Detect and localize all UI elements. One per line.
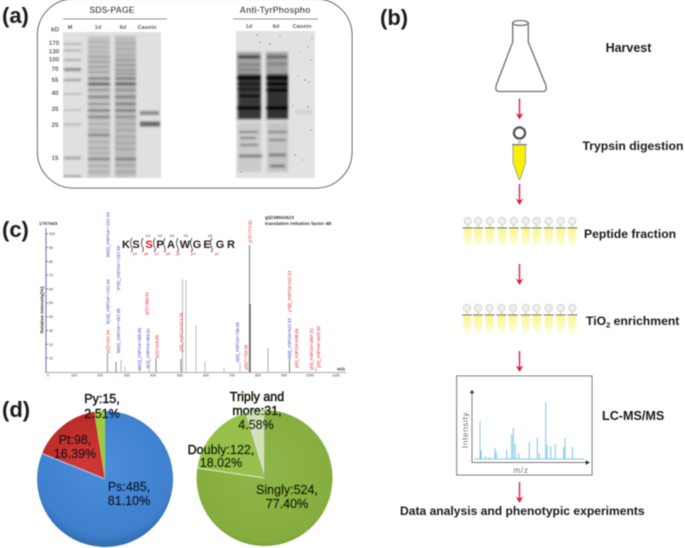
arrow	[516, 351, 523, 372]
label: LC-MS/MS: LC-MS/MS	[602, 409, 664, 423]
pie chart: phosphosite residues	[37, 392, 173, 547]
kD marker labels: kD	[51, 26, 59, 34]
western blot image	[236, 31, 315, 178]
chart: LC-MS/MS spectrum box	[457, 376, 592, 475]
panel label (b): (b)	[380, 5, 408, 30]
peptide sequence: R	[227, 239, 235, 251]
slice: Triply	[245, 410, 264, 478]
label: TiO2 enrichment: TiO	[586, 314, 606, 328]
SDS lane headers: Casein	[137, 25, 157, 31]
spectrum title	[265, 215, 332, 226]
label: data analysis: Data analysis and phenotypic experiments	[400, 504, 645, 518]
fragment ion labels: b(6)_H3PO4+736.95	[235, 322, 240, 362]
peptide sequence: S	[132, 239, 140, 251]
y axis: 100	[49, 232, 55, 236]
label: TiO2 enrichment: enrichment	[610, 314, 679, 328]
icon: flask	[496, 20, 546, 92]
x axis: 400	[150, 374, 156, 378]
western lane headers	[246, 24, 312, 30]
peptide sequence: y9	[133, 251, 138, 256]
kD marker labels: 100	[49, 56, 60, 64]
fragment ion labels: y(7)+772.01	[248, 219, 252, 243]
slice: Singly	[197, 410, 333, 546]
peptide sequence: y5	[176, 251, 181, 256]
fragment ion labels: b6(5)_H3PO4++267.05	[116, 308, 121, 353]
arrow	[516, 482, 523, 502]
pie labels: Singly:524,	[256, 483, 318, 497]
y axis: 20	[49, 343, 53, 347]
kD marker labels: 15	[51, 155, 59, 162]
fragment ion labels: y(2)+231.94	[106, 329, 110, 353]
x axis: 1100	[332, 374, 340, 378]
peptide sequence: G	[193, 239, 201, 251]
peptide sequence	[122, 233, 235, 256]
SDS lane headers: 1d	[95, 25, 102, 31]
kD marker labels: 25	[51, 122, 59, 129]
slice: Pt	[42, 412, 105, 479]
slice: Doubly	[197, 413, 264, 478]
y axis: 30	[49, 329, 53, 333]
peptide sequence: b3	[146, 233, 151, 238]
y axis title: Relative Intensity(%)	[40, 286, 46, 333]
panel: MS/MS spectrum	[39, 212, 346, 378]
western lane headers: 6d	[273, 24, 280, 30]
peptide sequence: S	[145, 239, 153, 251]
fragment ion labels: y(8)_H3PO4+513.55	[179, 312, 184, 352]
pie labels: Py:15,	[84, 392, 120, 406]
y axis	[46, 228, 55, 373]
frame	[38, 0, 352, 188]
label: Harvest: Harvest	[606, 41, 652, 55]
spectrum peaks	[108, 245, 316, 372]
peptide sequence: y2	[215, 251, 220, 256]
kD marker labels: 40	[51, 90, 59, 97]
fragment ion labels: y(9)_H3PO4+938.84	[294, 328, 299, 368]
western lane headers: 1d	[246, 24, 253, 30]
x axis: 0	[47, 374, 49, 378]
x axis: 200	[97, 374, 103, 378]
chart: LC-MS/MS spectrum box: m/z	[513, 465, 529, 475]
peptide sequence: y8	[144, 251, 149, 256]
peptide sequence: P	[156, 239, 164, 251]
y axis: 60	[49, 288, 53, 292]
x axis: m/z	[337, 366, 346, 372]
peptide sequence: b8	[208, 233, 213, 238]
pie labels: 81.10%	[108, 494, 150, 508]
panel label (a): (a)	[2, 3, 29, 28]
kD marker labels: 70	[51, 66, 59, 73]
label: Peptide fraction: Peptide fraction	[584, 227, 676, 241]
fragment ion labels: b5(3)_H3PO4+365.09	[137, 327, 142, 370]
fragment ion labels: y(6)7+753.99	[244, 344, 248, 370]
fragment ion labels: b5(6)_H3PO4++231.94	[106, 212, 110, 257]
SDS lane headers	[68, 25, 157, 31]
x axis	[46, 366, 346, 378]
label: TiO2 enrichment: 2	[606, 320, 610, 330]
kD marker labels: 130	[49, 48, 60, 56]
x axis: 900	[281, 374, 287, 378]
spectrum title: gi|238502623	[265, 215, 294, 220]
fragment ion labels: b(16)_H3PO4++231.94	[106, 279, 110, 324]
peptide sequence: W	[180, 239, 191, 251]
peptide sequence: b6	[184, 233, 189, 238]
panel label (c): (c)	[2, 217, 29, 242]
western lane headers: Casein	[292, 24, 312, 30]
peptide sequence: b5	[170, 233, 175, 238]
x axis: 1000	[306, 374, 314, 378]
pie labels: Pt:98,	[59, 433, 91, 447]
fragment ion labels: y(7)+386.51	[144, 291, 150, 315]
fragment ion labels: b*(5)_H3PO4++267.98	[116, 245, 121, 290]
heading: Anti-TyrPhospho: Anti-TyrPhospho	[240, 5, 311, 15]
tubes row: TiO2 enrichment	[462, 304, 577, 336]
peptide sequence: K	[122, 239, 130, 251]
x axis: 600	[203, 374, 209, 378]
pie labels: 4.58%	[238, 418, 274, 432]
fragment ion labels: b(3)_H3PO4+383.01	[146, 328, 150, 368]
pie labels: Triply and	[230, 390, 284, 404]
arrow	[516, 98, 523, 119]
x axis: 300	[124, 374, 130, 378]
SDS lane headers: M	[68, 25, 73, 31]
kD marker labels	[49, 26, 60, 162]
pie labels: Doubly:122,	[188, 443, 254, 457]
pie labels: more:31,	[232, 404, 282, 418]
panel: workflow	[400, 20, 683, 518]
y axis: 10	[49, 356, 53, 360]
pie labels: Ps:485,	[108, 480, 150, 494]
chart: LC-MS/MS spectrum box: Intensity	[460, 412, 470, 448]
x axis: 700	[229, 374, 235, 378]
x axis: 500	[177, 374, 183, 378]
arrow	[516, 264, 523, 284]
fragment ion labels: y*(8)_H3PO4+922.93	[287, 270, 292, 312]
peptide sequence: y6	[166, 251, 171, 256]
pie labels: 18.02%	[200, 456, 242, 470]
arrow	[516, 184, 523, 204]
heading: SDS-PAGE: SDS-PAGE	[89, 5, 135, 15]
fragment ion labels: y(9)_H3PO4+1007.91	[309, 327, 314, 370]
y axis: 40	[49, 315, 53, 319]
fragment ion labels	[106, 212, 321, 370]
SDS lane headers: 6d	[120, 25, 127, 31]
peptide sequence: A	[167, 239, 175, 251]
fragment ion labels: y(4)+418.09	[154, 334, 160, 358]
peptide sequence: G	[216, 239, 224, 251]
kD marker labels: 170	[49, 40, 60, 47]
kD marker labels: 55	[51, 77, 59, 84]
pie labels	[188, 390, 318, 511]
x axis: 800	[255, 374, 261, 378]
fragment ion labels: y(9)_H3PO4+1025.95	[316, 325, 321, 368]
slice: Ps	[37, 411, 173, 547]
y axis: 90	[49, 246, 53, 250]
peptide sequence: b4	[158, 233, 163, 238]
x axis: 100	[71, 374, 77, 378]
spectrum title: translation initiation factor 4B	[265, 221, 332, 226]
panel label (d): (d)	[2, 397, 30, 422]
label: Trypsin digestion: Trypsin digestion	[582, 139, 683, 153]
pie labels: 77.40%	[266, 497, 308, 511]
icon: yellow tube	[512, 128, 527, 180]
max intensity value: 1707443	[39, 221, 58, 226]
peptide sequence: E	[203, 239, 211, 251]
SDS-PAGE gel image	[63, 5, 318, 178]
pie labels: 2.51%	[84, 407, 120, 421]
y axis: 50	[49, 301, 53, 305]
slice: Py	[94, 411, 105, 479]
pie labels	[54, 392, 150, 508]
y axis: 70	[49, 274, 53, 278]
pie chart: phosphorylation multiplicity	[188, 390, 333, 546]
fragment ion labels: b(8)_H3PO4+922.93	[287, 318, 292, 358]
tubes row: peptide fraction	[463, 217, 577, 249]
y axis: 80	[49, 260, 53, 264]
pie labels: 16.39%	[54, 447, 96, 461]
peptide sequence: y7	[155, 251, 160, 256]
kD marker labels: 35	[51, 106, 59, 113]
peptide sequence: y4	[191, 251, 196, 256]
